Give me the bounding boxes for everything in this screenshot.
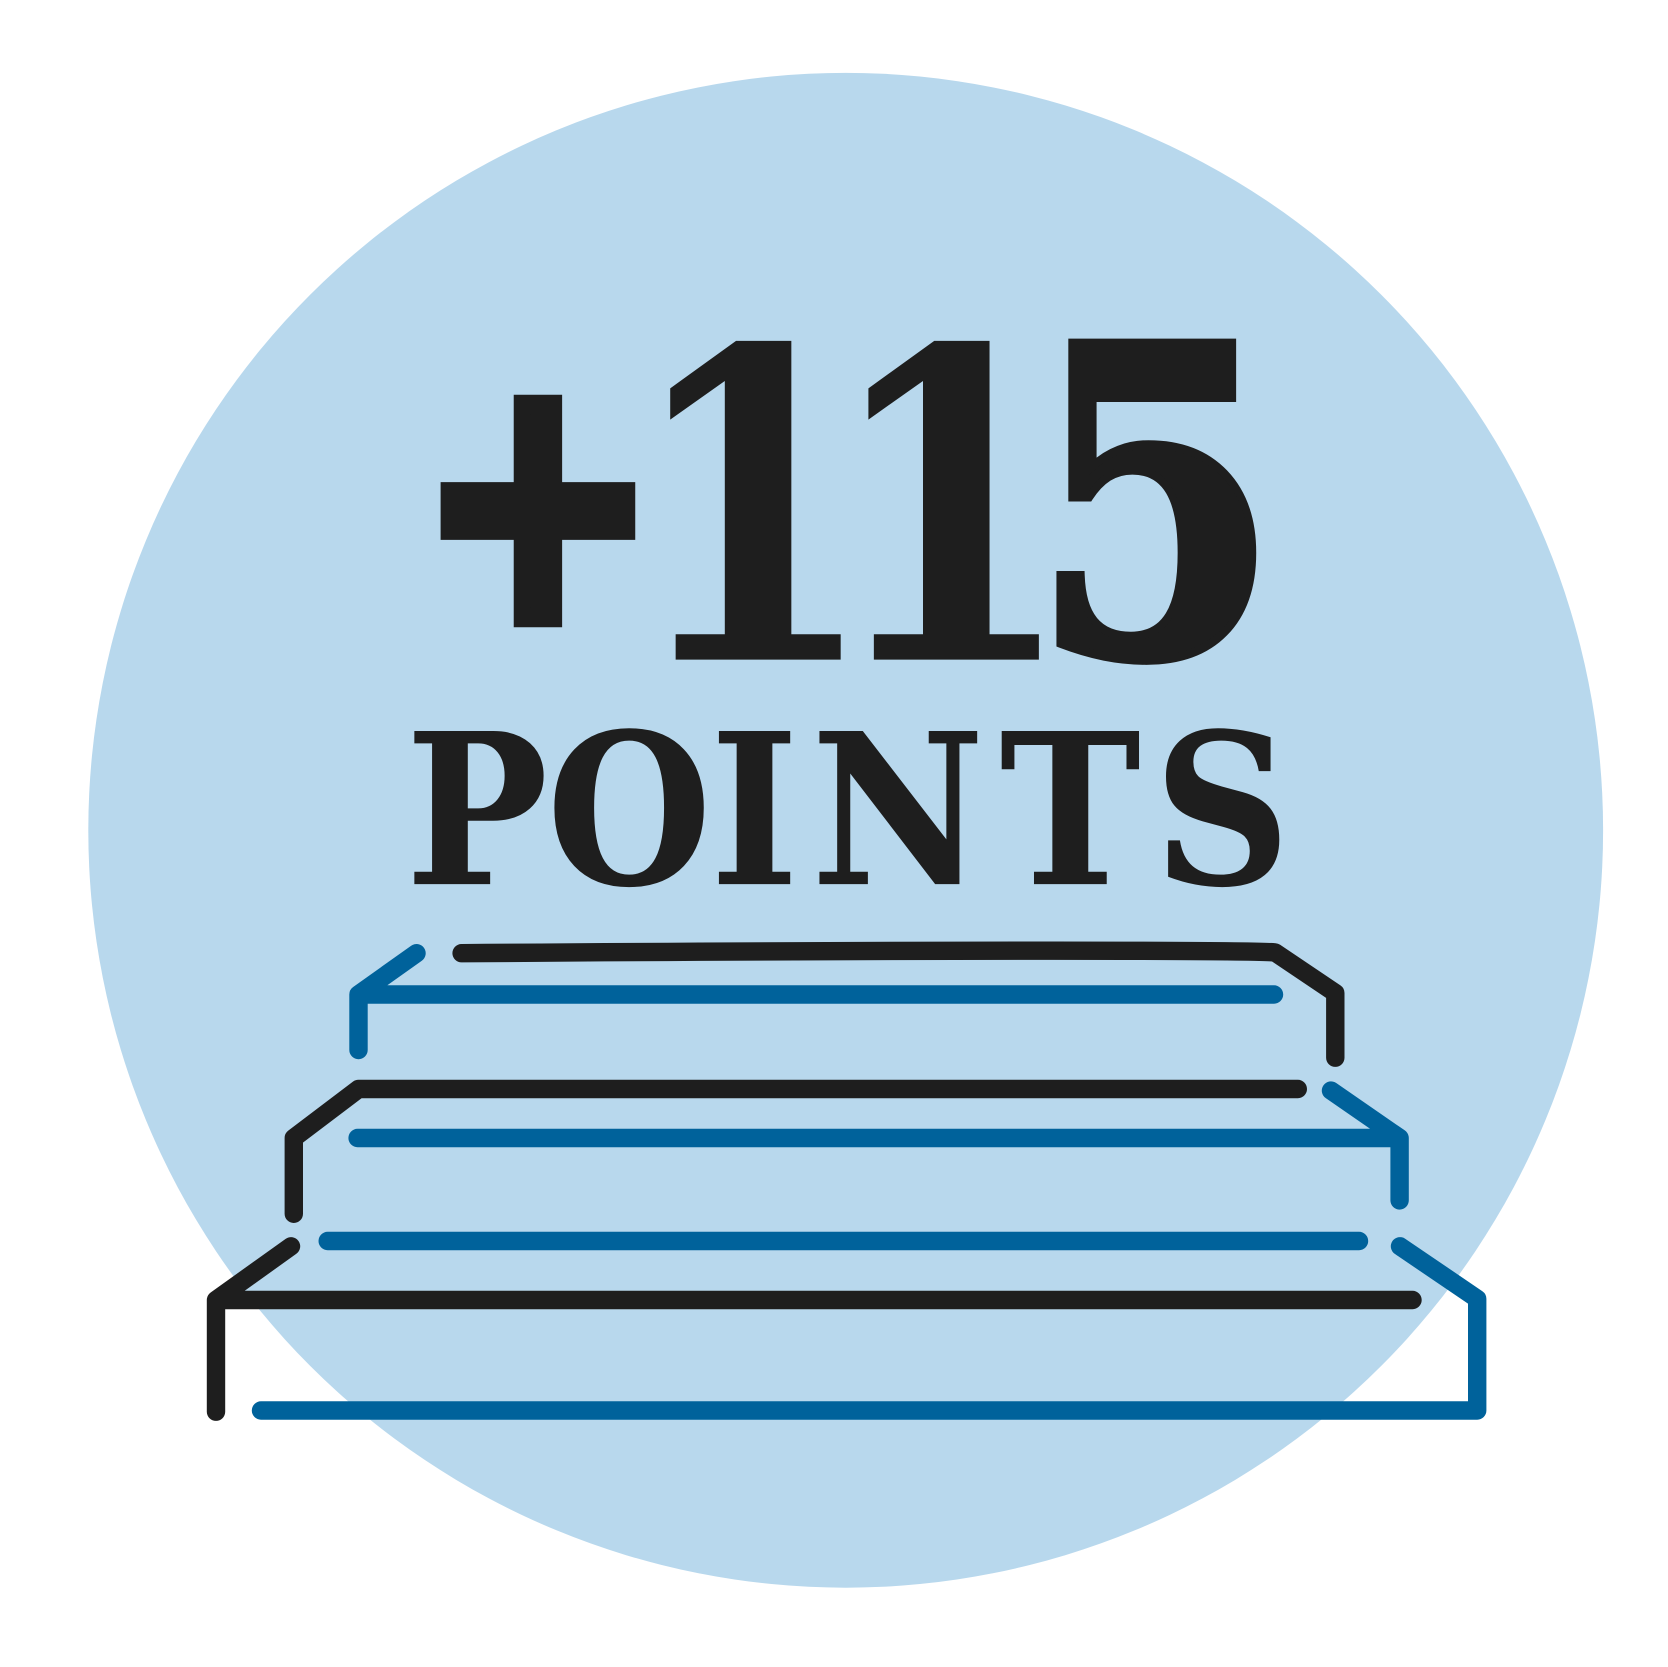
subtitle: POINTS: O <box>546 688 712 934</box>
subtitle: POINTS <box>405 688 1291 934</box>
icon: stack of steps <box>216 951 1477 1412</box>
subtitle: POINTS: S <box>1153 688 1291 934</box>
middle step black outline <box>294 1089 1298 1214</box>
bottom step blue upper line <box>328 1232 1359 1250</box>
title: +115: + <box>419 299 657 698</box>
subtitle: POINTS: P <box>405 688 548 934</box>
subtitle: POINTS: I <box>710 688 799 934</box>
subtitle: POINTS: T <box>1000 688 1141 934</box>
title: +115 <box>419 253 1280 762</box>
title: +115: 5 <box>1031 253 1280 755</box>
bottom step blue outline <box>261 1246 1477 1410</box>
middle step blue outline <box>358 1091 1400 1200</box>
title: +115: 1 <box>626 257 876 762</box>
top step blue outline <box>358 953 1274 1050</box>
top step black outline <box>462 951 1335 1058</box>
title: +115: 1 <box>825 257 1075 762</box>
subtitle: POINTS: N <box>811 688 985 934</box>
bottom step black outline <box>216 1246 1412 1412</box>
